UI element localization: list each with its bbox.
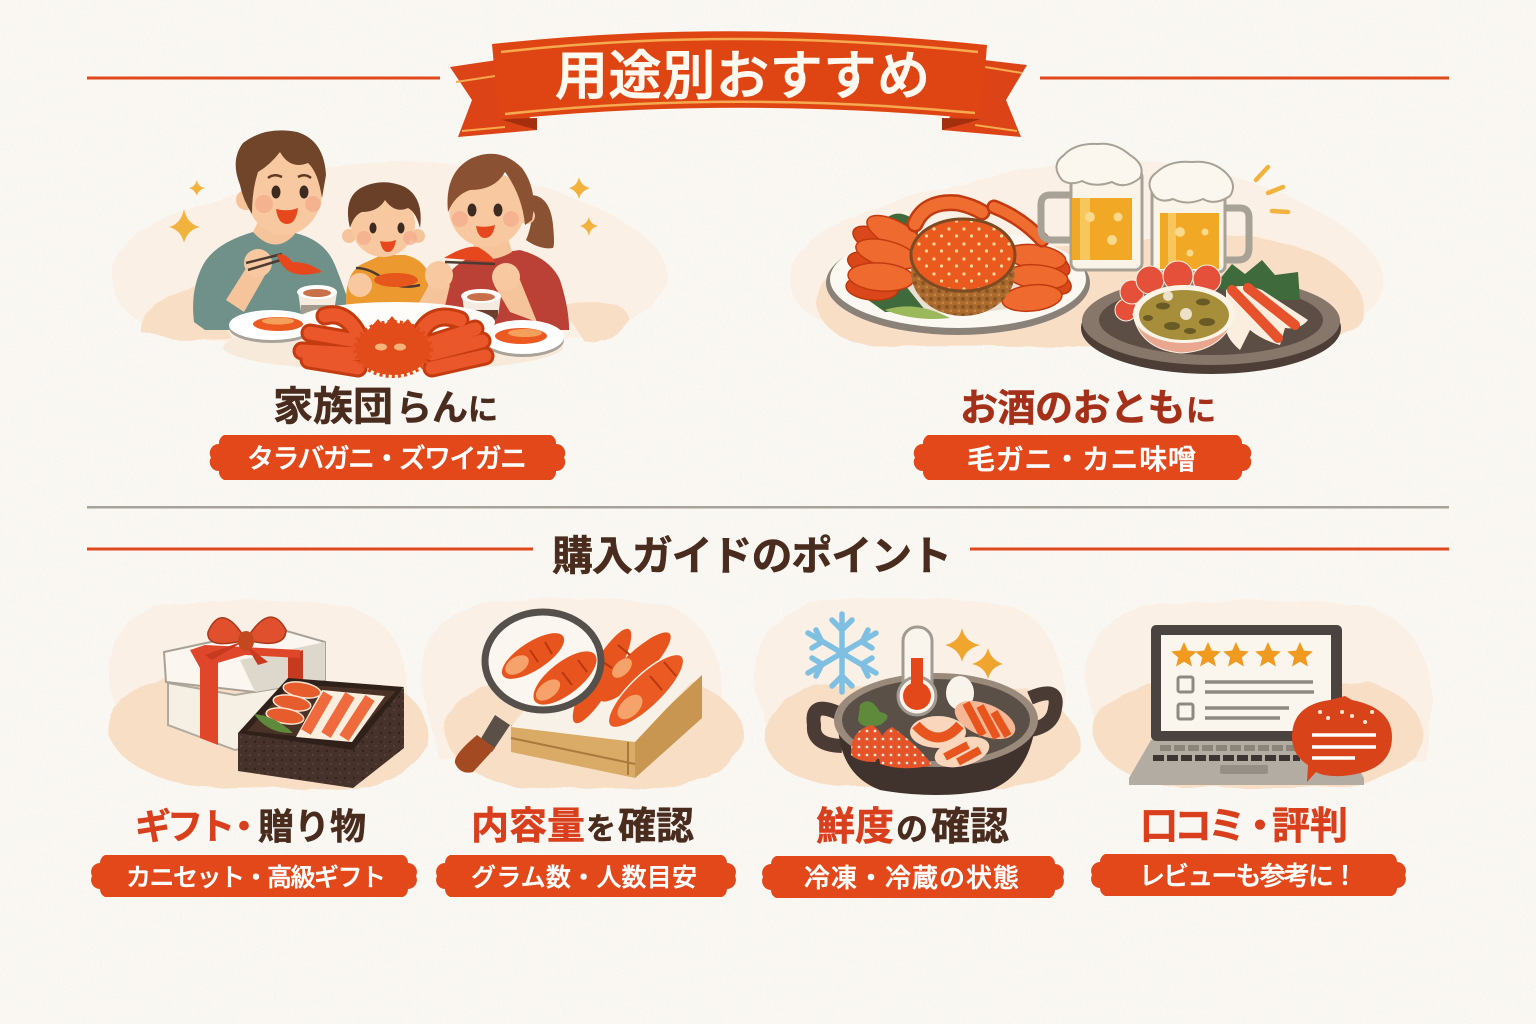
table and plates: [223, 302, 564, 371]
icon: beer mug left: [1041, 144, 1142, 270]
heading: freshness: 確認: [931, 806, 1009, 849]
heading: family: に: [468, 394, 498, 427]
panel: gift: [91, 600, 428, 897]
heading: reviews: 評判: [1272, 806, 1348, 848]
panel: check quantity: [420, 598, 745, 897]
icon: beer mug right: [1149, 162, 1249, 272]
heading: quantity: 内容量: [471, 806, 585, 848]
illustration backdrop: [790, 161, 1384, 347]
tag: crab types: [210, 435, 565, 480]
tag: grams and servings: [436, 855, 736, 897]
heading: gift: ・: [226, 806, 262, 847]
tag: gift sets: カニセット・高級ギフト: [126, 864, 386, 892]
icon: snowflake: [808, 614, 876, 692]
mother: [418, 154, 569, 330]
icon: pot food: [851, 676, 1021, 773]
illustration backdrop: [1085, 600, 1433, 787]
icon: sparkles: [169, 177, 598, 243]
father: [193, 130, 352, 330]
illustration backdrop: [108, 600, 428, 790]
heading: family: らん: [396, 387, 468, 428]
icon: laptop: [1129, 625, 1364, 785]
tag: grams and servings: グラム数・人数目安: [471, 864, 697, 892]
header rule right: [1040, 76, 1449, 80]
ribbon left tail: [450, 60, 537, 137]
tag: gift sets: [91, 855, 417, 897]
heading: drinks: に: [1186, 395, 1216, 428]
tag: crab types: タラバガニ・ズワイガニ: [247, 444, 527, 474]
large plate: [826, 230, 1090, 335]
heading: drinks: お酒のおとも: [960, 388, 1185, 430]
heading: freshness: 鮮度: [816, 806, 894, 849]
heading: freshness: の: [896, 811, 928, 847]
tag: hairy crab and miso: 毛ガニ・カニ味噌: [967, 444, 1196, 475]
section rule right: [970, 548, 1449, 550]
icon: magnifying glass: [455, 612, 605, 773]
tag: frozen or chilled: 冷凍・冷蔵の状態: [804, 863, 1019, 893]
icon: hot pot: [814, 673, 1056, 795]
tag: frozen or chilled: [762, 856, 1064, 898]
ribbon main band: [492, 31, 987, 120]
child: [342, 182, 430, 305]
heading: quantity: 確認: [618, 806, 694, 848]
icon: lacquer box of crab: [238, 678, 404, 788]
tag: hairy crab and miso: [914, 435, 1251, 480]
tag: reviews: レビューも参考に！: [1139, 861, 1358, 891]
title ribbon banner: [450, 31, 1027, 137]
panel: with drinks: [790, 144, 1384, 480]
heading: reviews: ・: [1241, 806, 1279, 848]
icon: sparkles: [945, 628, 1003, 679]
heading: family: 家族団: [273, 385, 393, 429]
crab platter: [302, 315, 485, 375]
heading: gift: 贈り物: [258, 806, 366, 847]
panel: reviews: [1085, 600, 1433, 896]
illustration backdrop: [112, 161, 667, 342]
icon: review list: [1178, 677, 1314, 719]
icon: five stars: [1171, 642, 1313, 666]
section rule left: [87, 548, 533, 550]
dark plate with miso shell: [1081, 260, 1341, 374]
icon: clink lines: [1256, 167, 1288, 212]
panel: family meal: [112, 130, 667, 480]
icon: crab legs: [564, 623, 693, 737]
icon: thermometer: [898, 627, 936, 715]
heading: reviews: 口コミ: [1140, 806, 1242, 848]
dipping bowls: [297, 285, 501, 324]
icon: gift box: [164, 617, 325, 750]
icon: hairy crab: [845, 203, 1075, 319]
tag: reviews: [1091, 854, 1406, 896]
heading: buying guide: 購入ガイドのポイント: [552, 533, 952, 579]
illustration backdrop: [753, 598, 1080, 790]
heading: quantity: を: [586, 813, 616, 846]
icon: wooden box: [511, 640, 702, 778]
header rule left: [87, 76, 440, 80]
heading: gift: ギフト: [135, 806, 231, 847]
icon: speech bubble: [1292, 696, 1392, 782]
title: 用途別おすすめ: [555, 47, 930, 106]
illustration backdrop: [420, 598, 745, 790]
ribbon right tail: [942, 60, 1027, 137]
panel: freshness: [753, 598, 1080, 898]
